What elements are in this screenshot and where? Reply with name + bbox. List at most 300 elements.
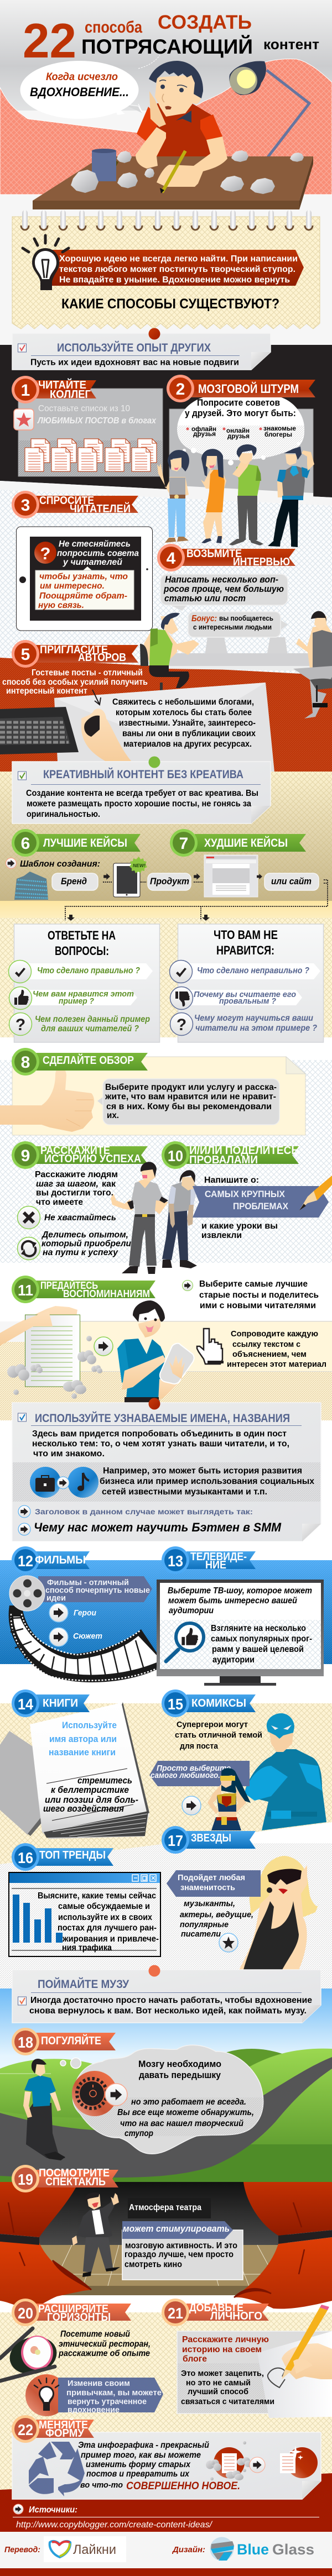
speech bubble: Когда исчезло (46, 71, 118, 83)
badge 17 (162, 1826, 256, 1854)
TV: Выберите ТВ-шоу, которое может (168, 1586, 312, 1596)
badge 12: ФИЛЬМЫ (35, 1554, 86, 1566)
badge 8: 8 (21, 1053, 30, 1072)
badge 4: 4 (167, 549, 176, 568)
badge 8: СДЕЛАЙТЕ ОБЗОР (43, 1053, 134, 1067)
panel: what you dislike: Что сделано неправильно ? (197, 966, 309, 975)
paper sheet with contact text: которым хотелось бы стать более (116, 708, 252, 717)
footer translation credit (4, 2536, 126, 2562)
paper sheet with contact text: Свяжитесь с небольшими блогами, (112, 697, 254, 707)
badge 4 (157, 544, 295, 571)
badge 15: КОМИКСЫ (191, 1697, 246, 1709)
superhero caption: Супергерои могут (177, 1720, 248, 1729)
badge 18: ПОГУЛЯЙТЕ (41, 2034, 101, 2047)
film items: Сюжет (73, 1631, 102, 1641)
badge 8 (12, 1048, 148, 1075)
step 11 text: ими с новыми читателями (200, 1301, 316, 1310)
badge 7: ХУДШИЕ КЕЙСЫ (204, 836, 288, 849)
left curtain (0, 2182, 91, 2310)
cream khaki background (0, 772, 332, 1321)
badge 7: 7 (179, 835, 188, 853)
guest post text: интересный контент (6, 686, 87, 696)
tablet: им интересно. (40, 581, 105, 591)
badge 2: МОЗГОВОЙ ШТУРМ (198, 382, 299, 396)
theatre caption: мозговую активность. И это (125, 2241, 237, 2250)
pen cup (92, 149, 117, 181)
badge 13: 13 (168, 1552, 183, 1570)
guest post text: Гостевые посты - отличный (32, 668, 143, 678)
icon: sushi (0, 2328, 61, 2381)
comics ribbon: самого любимого. (151, 1771, 220, 1780)
intro ribbon (52, 250, 304, 286)
tablet (17, 527, 153, 631)
speech bubbles interview: Написать несколько воп- (165, 574, 278, 585)
panel: step 2 brainstorm: блогеры (264, 431, 292, 438)
section header: recognizable names: несколько тем: то, о чем хотят узнать ваши читатели, и то, (32, 1439, 289, 1449)
guest post text: способ без особых усилий получить (2, 678, 148, 687)
intro ribbon: текстов любого может постигнуть творческий ступор. (59, 265, 295, 274)
badge 15: 15 (168, 1696, 183, 1713)
title (23, 12, 319, 68)
film ribbon (38, 1576, 152, 1603)
theatre background (0, 2182, 332, 2492)
speech bubbles interview: вы пообщаетесь (219, 615, 273, 622)
tablet: ную связь. (38, 601, 84, 610)
panel: step 2 brainstorm: друзья (227, 432, 250, 440)
panel: step 2 brainstorm: знакомые (263, 424, 296, 432)
panel: answer questions: ? (15, 1016, 25, 1034)
badge 11: ПРЕДАЙТЕСЬ (40, 1279, 98, 1291)
panel: answer questions: Чем полезен данный пример (35, 1015, 150, 1024)
guest post text (2, 668, 148, 696)
footer design credit: Blue (237, 2541, 269, 2558)
filmstrip (9, 1606, 157, 1682)
badge 10: И/ИЛИ ПОДЕЛИТЕСЬ (189, 1145, 299, 1157)
badge 6: 6 (21, 835, 30, 853)
hand with pencil (282, 2305, 332, 2379)
panel: step 2 brainstorm: офлайн (191, 425, 216, 433)
section header: recognizable names: сетей известными музыкантами и т.п. (102, 1487, 267, 1497)
sushi text: этнический ресторан, (59, 2339, 151, 2349)
template flow: Продукт (150, 876, 189, 886)
arrow pointing to mouse (92, 690, 101, 705)
panel: answer questions: ОТВЕТЬТЕ НА (48, 928, 116, 942)
TV: самых популярных прог- (211, 1634, 312, 1644)
speech bubbles interview: с интересными людьми (193, 623, 272, 631)
panel: answer questions: Чем вам нравится этот (33, 989, 134, 999)
thought cloud: но это работает не всегда. (131, 2097, 246, 2107)
question heading: КАКИЕ СПОСОБЫ СУЩЕСТВУЮТ? (61, 296, 279, 312)
badge 22: ФОРМУ (45, 2427, 85, 2439)
panel: what you dislike: читатели на этом примере ? (195, 1024, 317, 1033)
badge 16: 16 (18, 1849, 33, 1866)
window trends: постах для лучшего ран- (58, 1923, 157, 1933)
card: step 22: СОВЕРШЕННО НОВОЕ. (126, 2480, 240, 2492)
step 9 text: как (102, 1179, 116, 1189)
tablet: Не стесняйтесь (59, 539, 131, 549)
badge 22: 22 (18, 2421, 33, 2438)
actor (72, 2192, 120, 2277)
habits ribbon with bulb (25, 2374, 163, 2416)
section header: recognizable names: Чему нас может научить Бэтмен в SMM (34, 1520, 282, 1534)
speech bubble: ВДОХНОВЕНИЕ... (30, 85, 129, 99)
title: ПОТРЯСАЮЩИЙ (81, 35, 253, 58)
cursor caption: ссылку текстом с (232, 1340, 300, 1349)
step 9 text: вы достигли того, (36, 1188, 113, 1198)
card: step 22: во что-то (80, 2480, 123, 2490)
step 9 text: Не хвастайтесь (44, 1213, 116, 1223)
section header: catch the muse: снова вернулось к вам. Вот несколько идей, как поймать музу. (29, 2006, 307, 2016)
thought cloud: давать передышку (139, 2070, 221, 2080)
tablet: Поощряйте обрат- (39, 591, 127, 601)
badge 1: 1 (21, 381, 30, 400)
badge 11: 11 (18, 1282, 33, 1299)
footer design credit: Glass (272, 2541, 314, 2558)
comics ribbon (149, 1761, 250, 1786)
badge 22 (12, 2415, 94, 2443)
title: СОЗДАТЬ (158, 12, 252, 33)
badge 11 (12, 1276, 155, 1303)
section header: creative content: КРЕАТИВНЫЙ КОНТЕНТ БЕЗ КРЕАТИВА (43, 768, 243, 781)
thought cloud: что на вас нашел творческий (120, 2119, 243, 2128)
badge 7 (170, 829, 306, 857)
celebrity area background (0, 1703, 332, 1991)
badge 15 (162, 1690, 256, 1717)
keyboard (0, 707, 79, 754)
smoke puffs (7, 1336, 102, 1399)
speech bubbles interview (160, 574, 288, 637)
badge 5: ПРИГЛАСИТЕ (40, 644, 108, 656)
badge 14: КНИГИ (43, 1697, 78, 1709)
interview scene (140, 611, 332, 718)
wonder woman (208, 1768, 251, 1830)
badge 6: ЛУЧШИЕ КЕЙСЫ (43, 836, 127, 849)
badge 2 (167, 375, 315, 402)
badge 17: ЗВЕЗДЫ (191, 1832, 231, 1844)
step 9 text: шаг за шагом, (36, 1179, 98, 1189)
speech bubbles interview: росов проще, чем большую (163, 584, 284, 594)
cursor caption: интересен этот материал (227, 1360, 326, 1369)
panel: answer questions (9, 924, 159, 1042)
panel: personal story: историю на своем (182, 2345, 262, 2354)
film items (49, 1603, 102, 1646)
crumpled paper balls (71, 150, 304, 194)
lamp (220, 61, 309, 180)
panel: personal story (177, 2331, 332, 2418)
right curtain (234, 2182, 332, 2309)
step 9 text (18, 1170, 132, 1260)
celebrity ribbon: Подойдет любая (178, 1873, 245, 1882)
panel: step 2 brainstorm: друзья (193, 430, 216, 438)
panel: step 2 brainstorm (169, 397, 313, 497)
panel: what you dislike: НРАВИТСЯ: (216, 943, 274, 957)
panel: personal story: Расскажите личную (182, 2335, 269, 2344)
section header: recognizable names: что им знакомо. (33, 1449, 105, 1458)
TV: рамм у вашей целевой (212, 1645, 304, 1654)
badge 14: 14 (18, 1696, 33, 1713)
book: название книги (49, 1747, 116, 1757)
badge 16 (12, 1843, 113, 1871)
badge 21: ДОБАВЬТЕ (189, 2302, 243, 2314)
paper sheet with contact text: материалов на других ресурсах. (123, 739, 252, 749)
section header: creative content: можете размещать просто хорошие посты, не гонясь за (27, 799, 251, 809)
step 10 text: и какие уроки вы (201, 1221, 278, 1231)
tablet: попросить совета (57, 549, 139, 558)
panel: step 8 review: жите, что вам нравится или не нравит- (105, 1092, 276, 1101)
badge 1 (12, 376, 96, 403)
habits ribbon with bulb: привычкам, вы можете (66, 2388, 162, 2397)
badge 14 (12, 1690, 90, 1717)
TV: аудитории (169, 1606, 214, 1615)
book: стремитесь (77, 1775, 132, 1786)
dark background panel (0, 345, 332, 497)
badge 19: ПОСМОТРИТЕ (39, 2167, 110, 2179)
badge 19: 19 (18, 2171, 33, 2188)
character at desk (136, 61, 227, 193)
panel: step 1 grey board: Составьте список из 10 (38, 404, 130, 413)
badge 21 (162, 2299, 269, 2326)
hero background (0, 0, 332, 195)
red guest posts background (0, 658, 332, 772)
step 10 text: САМЫХ КРУПНЫХ (205, 1189, 286, 1199)
notepad (12, 210, 320, 329)
theatre caption: Атмосфера театра (129, 2203, 201, 2212)
step 9 text: на пути к успеху (43, 1248, 118, 1257)
template heading: Шаблон создания: (20, 859, 100, 869)
section header: catch the muse: ПОЙМАЙТЕ МУЗУ (38, 1977, 129, 1991)
card: step 22: Эта инфографика - прекрасный (78, 2441, 209, 2450)
badge 20: 20 (18, 2305, 33, 2322)
paper sheet with contact text: известными. Узнайте, заинтересо- (119, 718, 256, 728)
step 11 text (183, 1279, 319, 1310)
badge 4: ВОЗЬМИТЕ (186, 548, 242, 560)
card: step 22: постов и превратить их (86, 2469, 190, 2479)
section header: recognizable names: Заголовок в данном случае может выглядеть так: (35, 1507, 253, 1516)
book (0, 1702, 149, 1839)
book: Используйте (62, 1720, 117, 1730)
panel: answer questions: для ваших читателей ? (41, 1024, 139, 1033)
badge 9: ИСТОРИЮ УСПЕХА (44, 1153, 141, 1165)
panel: step 8 review: ся в них. Кому бы вы рекомендовали (106, 1102, 272, 1111)
badge 4: ИНТЕРВЬЮ (233, 556, 290, 568)
intro ribbon: Хорошую идею не всегда легко найти. При написании (59, 254, 298, 264)
section header: catch the muse: Иногда достаточно просто начать работать, чтобы вдохновение (30, 1996, 312, 2005)
badge 6 (12, 829, 141, 857)
step 10 text: ПРОБЛЕМАХ (233, 1201, 289, 1211)
hand on mouse (81, 709, 131, 761)
window trends: самые обсуждаемые и (58, 1902, 150, 1911)
section header: creative content: оригинальностью. (27, 810, 100, 819)
badge 11: ВОСПОМИНАНИЯМ (63, 1288, 150, 1299)
film items: Герои (74, 1608, 96, 1618)
template flow: или сайт (271, 876, 312, 886)
icon: cursor hand (197, 1329, 224, 1364)
badge 5: 5 (21, 646, 30, 664)
thought cloud: Вы все еще можете обнаружить, (117, 2108, 254, 2117)
section header: recognizable names: Здесь вам придется попробовать объединить в один пост (32, 1429, 287, 1439)
card: step 22: пример того, как вы можете (81, 2451, 201, 2460)
panel: step 2 brainstorm: у друзей. Это могут быть: (185, 408, 296, 418)
template flow: Бренд (61, 876, 87, 886)
TV (157, 1580, 324, 1686)
badge 3: ЧИТАТЕЛЕЙ (70, 502, 131, 515)
film ribbon: Фильмы - отличный (47, 1578, 129, 1587)
template flow: NEW! (133, 863, 146, 868)
desk (33, 156, 313, 209)
book: к беллетристике (51, 1785, 129, 1795)
TV: аудитории (212, 1655, 255, 1665)
window trends: ния трафика (62, 1943, 112, 1953)
badge 19: СПЕКТАКЛЬ (45, 2176, 106, 2188)
successful man (111, 1162, 168, 1274)
panel: what you dislike: Чему могут научиться ваши (194, 1014, 313, 1023)
comics ribbon: Просто выберите (157, 1764, 231, 1773)
superhero caption: стать отличной темой (175, 1730, 262, 1740)
title: контент (263, 36, 319, 53)
badge 21: ЛИЧНОГО (210, 2310, 262, 2322)
badge 13: ТЕЛЕВИДЕ- (190, 1551, 247, 1563)
superhero caption: для поста (180, 1741, 219, 1751)
sad man (162, 1170, 197, 1268)
icon: lightbulb (23, 235, 69, 290)
section header: catch the muse (12, 1965, 321, 2023)
section header: creative content: Создание контента не всегда требует от вас креатива. Вы (26, 789, 258, 798)
panel: what you dislike: ? (177, 1016, 186, 1034)
cursor caption: объяснением, чем (232, 1350, 307, 1359)
badge 22: МЕНЯЙТЕ (39, 2418, 88, 2431)
badge 1: ЧИТАЙТЕ (38, 378, 86, 391)
celebrity ribbon: знаменитость (180, 1883, 235, 1892)
theatre caption (122, 2198, 243, 2280)
tablet: у читателей (63, 558, 122, 567)
panel: step 8 review (0, 1057, 305, 1135)
celebrity types: популярные (180, 1920, 229, 1929)
tablet: чтобы узнать, что (39, 572, 128, 581)
people group (157, 444, 314, 547)
light separator and crosshatch background (0, 481, 332, 680)
speech bubbles interview: статью или пост (164, 593, 246, 604)
panel: step 1 grey board: ЛЮБИМЫХ ПОСТОВ в блогах (37, 416, 157, 426)
badge 1: КОЛЛЕГ (50, 389, 91, 401)
badge 5: АВТОРОВ (78, 652, 126, 664)
superhero (245, 1713, 326, 1830)
panel: personal story: связаться с читателями (181, 2397, 274, 2406)
habits ribbon with bulb: Изменив своим (68, 2379, 130, 2388)
section header: use others' experience: ИСПОЛЬЗУЙТЕ ОПЫТ ДРУГИХ (57, 341, 211, 354)
TV: может быть интересно вашей (168, 1596, 297, 1606)
celebrity types (180, 1899, 253, 1952)
panel: answer questions: пример ? (59, 996, 94, 1006)
section header: creative content (12, 756, 271, 823)
badge 20: ГОРИЗОНТЫ (47, 2311, 111, 2323)
speech bubbles interview: Бонус: (191, 614, 217, 623)
step 9 text: который приобрели (42, 1239, 132, 1248)
sources: http://www.copyblogger.com/create-content-ideas/ (16, 2520, 213, 2530)
panel: what you dislike: Почему вы считаете его (194, 990, 296, 999)
book: шего воздействия (43, 1803, 124, 1814)
habits ribbon with bulb: вернуть утраченное (68, 2397, 147, 2406)
film ribbon: идеи (46, 1594, 66, 1603)
badge 20 (12, 2299, 131, 2326)
window trends: Выясните, какие темы сейчас (38, 1891, 156, 1901)
celebrity ribbon (167, 1870, 261, 1897)
badge 10: ПРОВАЛАМИ (189, 1154, 258, 1166)
badge 18: 18 (18, 2034, 33, 2051)
walking man (23, 2059, 65, 2160)
badge 20: РАСШИРЯЙТЕ (38, 2302, 108, 2315)
title: 22 (23, 13, 76, 68)
thought cloud (60, 2045, 266, 2154)
cursor caption: Сопроводите каждую (231, 1329, 318, 1339)
badge 10 (162, 1141, 299, 1169)
cursor caption (227, 1329, 326, 1369)
badge 3: 3 (21, 496, 30, 515)
step 9 text: Расскажите людям (35, 1170, 118, 1179)
badge 19 (12, 2165, 118, 2192)
panel: what you dislike: провальным ? (219, 996, 276, 1006)
window trends: жирования и привлече- (62, 1934, 159, 1944)
panel: what you dislike (169, 924, 323, 1042)
badge 3 (12, 491, 138, 518)
section header: use others' experience (12, 328, 271, 370)
celebrity types: писатели (181, 1929, 221, 1939)
panel: what you dislike: ЧТО ВАМ НЕ (214, 928, 278, 942)
book: или поэзии для боль- (45, 1795, 138, 1805)
footer translation credit: Лайкни (73, 2542, 116, 2557)
sushi text (58, 2330, 151, 2358)
speech bubble (20, 55, 160, 119)
man with tablet (117, 1300, 194, 1404)
habits ribbon with bulb: вдохновение (68, 2405, 120, 2415)
blonde woman (239, 1856, 319, 1970)
badge 3: СПРОСИТЕ (39, 495, 94, 507)
sky and hills (0, 1989, 332, 2183)
hands holding document (0, 1306, 80, 1387)
celebrity types: актеры, ведущие, (180, 1910, 253, 1919)
celebrity types: музыканты, (184, 1899, 235, 1908)
badge 12 (12, 1546, 90, 1574)
paper sheet with contact text: ваны ли они в публикации своих (122, 729, 256, 738)
panel: step 1 grey board (14, 389, 163, 476)
step 11 text: Выберите самые лучшие (199, 1279, 308, 1289)
badge 13 (162, 1546, 256, 1574)
card: step 22: изменить форму старых (86, 2460, 191, 2469)
film ribbon: способ почерпнуть новые (45, 1586, 150, 1595)
book: имя автора или (49, 1734, 117, 1744)
section header: use others' experience: Пусть их идеи вдохновят вас на новые подвиги (30, 358, 239, 367)
panel: answer questions: Что сделано правильно ? (37, 966, 140, 975)
badge 9: 9 (21, 1147, 30, 1165)
window trends: используйте их в своих (58, 1913, 152, 1922)
panel: personal story: Это может зацепить, (181, 2369, 264, 2378)
section header: recognizable names: ИСПОЛЬЗУЙТЕ УЗНАВАЕМЫЕ ИМЕНА, НАЗВАНИЯ (35, 1412, 290, 1425)
step 11 text: старые посты и поделитесь (199, 1290, 319, 1300)
thought cloud: ступор (124, 2129, 153, 2138)
section header: recognizable names: бизнеса или пример использования социальных (100, 1477, 314, 1486)
badge 21: 21 (168, 2305, 183, 2322)
blue band background (0, 1541, 332, 1703)
tablet: ? (40, 544, 50, 563)
template flow (14, 855, 327, 900)
title: способа (85, 18, 142, 36)
superhero caption (175, 1720, 262, 1751)
sources: Источники: (29, 2505, 77, 2515)
step 9 text: Делитесь опытом, (41, 1230, 128, 1240)
step 10 text: извлекли (201, 1231, 242, 1240)
step 10 text: Напишите о: (204, 1176, 259, 1185)
theatre caption: гораздо лучше, чем просто (124, 2250, 234, 2259)
badge 5 (12, 640, 138, 668)
